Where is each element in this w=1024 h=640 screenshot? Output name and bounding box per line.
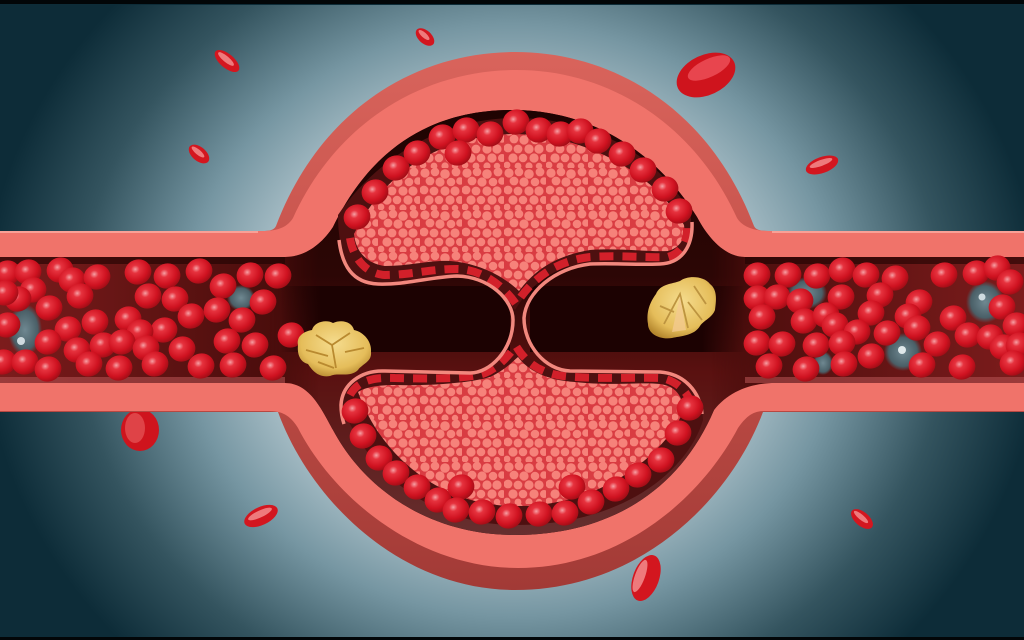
cells lining the lower plaque bbox=[338, 392, 707, 532]
right fatty deposit bbox=[647, 277, 716, 338]
grey gaps between cells bbox=[8, 277, 1004, 375]
cells in left vessel bbox=[0, 254, 308, 385]
floating red blood cells behind the vessel bbox=[121, 25, 876, 533]
vessel lumen bbox=[0, 100, 1024, 540]
upper plaque bbox=[338, 118, 691, 310]
cells in right vessel bbox=[740, 252, 1024, 385]
checker band between plaque and lumen bbox=[350, 225, 693, 410]
pink lining of the narrowed channel bbox=[339, 222, 702, 424]
cells lining the upper plaque bbox=[340, 106, 696, 233]
floating red blood cell below the vessel bbox=[626, 551, 666, 605]
lower plaque bbox=[342, 345, 703, 525]
left fatty deposit bbox=[298, 321, 371, 376]
